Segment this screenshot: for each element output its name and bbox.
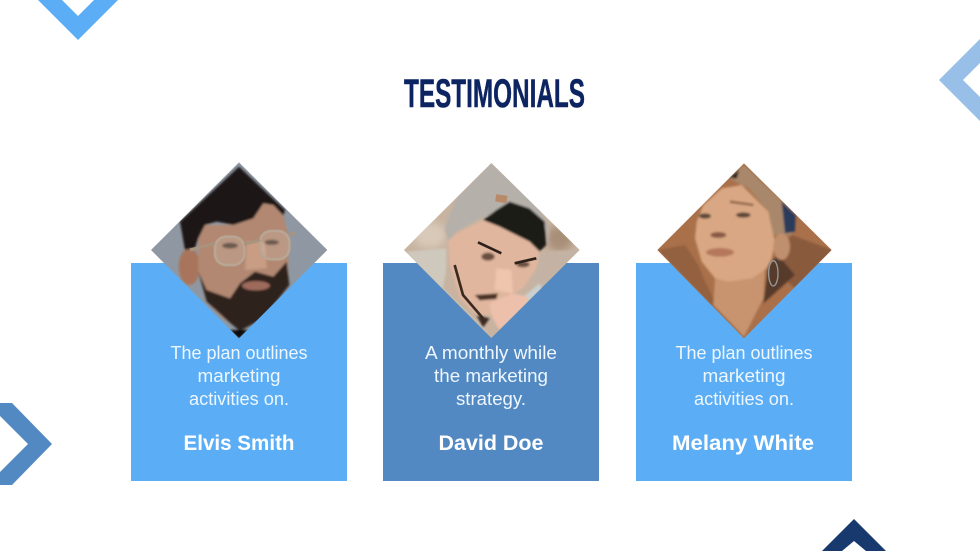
- title: TESTIMONIALS: [404, 72, 585, 116]
- chevron: right: [939, 39, 980, 121]
- chevron: top left: [38, 0, 118, 40]
- testimonial text: [676, 343, 812, 409]
- testimonial text: A monthly while: [425, 343, 557, 363]
- testimonial text: [425, 343, 557, 409]
- photo: woman with headband: [655, 162, 833, 340]
- panel: Elvis Smith: [131, 162, 347, 481]
- card background: [131, 263, 347, 481]
- testimonial text: activities on.: [189, 389, 289, 409]
- testimonial text: The plan outlines: [170, 343, 308, 363]
- testimonial text: strategy.: [456, 389, 526, 409]
- card background: [383, 263, 599, 481]
- testimonial text: the marketing: [434, 366, 548, 386]
- name: Melany White: [672, 432, 814, 455]
- testimonial text: marketing: [702, 366, 786, 386]
- name: Elvis Smith: [184, 432, 294, 455]
- photo: man with glasses: [150, 162, 328, 340]
- chevron: left: [0, 403, 52, 485]
- chevron: bottom right: [822, 519, 886, 551]
- testimonial text: [170, 343, 308, 409]
- name: David Doe: [438, 432, 544, 455]
- panel: David Doe: [383, 162, 599, 481]
- photo: man with beanie: [403, 162, 581, 340]
- panel: Melany White: [636, 162, 852, 481]
- card background: [636, 263, 852, 481]
- testimonial text: activities on.: [694, 389, 794, 409]
- testimonial text: marketing: [198, 366, 280, 386]
- testimonial text: The plan outlines: [676, 343, 812, 363]
